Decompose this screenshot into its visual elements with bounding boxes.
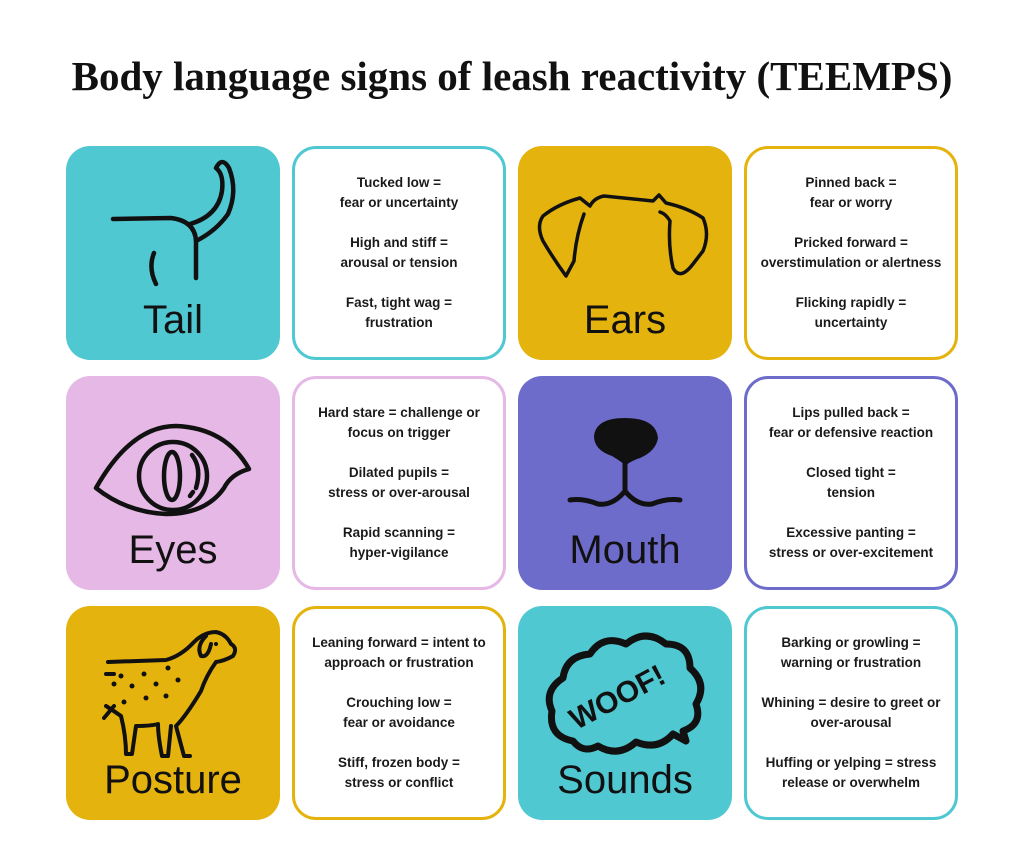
- panel: ears icon tile: Ears: [584, 298, 666, 342]
- panel: eyes text: stress or over-arousal: [328, 485, 470, 500]
- panel: posture text: Crouching low =: [346, 695, 452, 710]
- panel: tail text: frustration: [365, 315, 433, 330]
- panel: eyes icon tile: Eyes: [129, 528, 217, 572]
- panel: posture text: [292, 606, 506, 820]
- panel: mouth text: Lips pulled back =: [792, 405, 910, 420]
- panel: tail text: arousal or tension: [340, 255, 458, 270]
- panel: tail text: Tucked low =: [357, 175, 441, 190]
- panel: tail icon tile: [66, 146, 280, 360]
- panel: ears text: [744, 146, 958, 360]
- panel: eyes text: hyper-vigilance: [349, 545, 449, 560]
- panel: sounds text: release or overwhelm: [782, 775, 920, 790]
- panel: tail text: fear or uncertainty: [340, 195, 458, 210]
- panel: posture text: Stiff, frozen body =: [338, 755, 460, 770]
- panel: sounds text: Whining = desire to greet or: [762, 695, 940, 710]
- panel: posture text: fear or avoidance: [343, 715, 455, 730]
- panel: tail icon tile: Tail: [143, 298, 203, 342]
- icon: dog posture: [102, 630, 238, 758]
- panel: posture text: approach or frustration: [324, 655, 474, 670]
- panel: sounds text: over-arousal: [810, 715, 892, 730]
- panel: tail text: High and stiff =: [350, 235, 448, 250]
- panel: tail text: [292, 146, 506, 360]
- panel: mouth text: Excessive panting =: [786, 525, 916, 540]
- icon: woof bubble: [546, 632, 704, 755]
- panel: mouth text: [744, 376, 958, 590]
- panel: eyes text: [292, 376, 506, 590]
- panel: eyes text: Hard stare = challenge or: [318, 405, 480, 420]
- panel: eyes text: focus on trigger: [348, 425, 450, 440]
- panel: ears text: overstimulation or alertness: [761, 255, 941, 270]
- panel: tail text: Fast, tight wag =: [346, 295, 452, 310]
- panel: ears text: fear or worry: [810, 195, 892, 210]
- panel: posture text: Leaning forward = intent to: [312, 635, 486, 650]
- panel: eyes icon tile: [66, 376, 280, 590]
- panel: sounds text: Huffing or yelping = stress: [766, 755, 936, 770]
- icon: nose and mouth: [568, 418, 682, 507]
- panel: eyes text: Dilated pupils =: [349, 465, 449, 480]
- panel: sounds icon tile: Sounds: [557, 758, 693, 802]
- panel: eyes text: Rapid scanning =: [343, 525, 455, 540]
- icon: tail: [110, 160, 236, 286]
- panel: ears text: Pricked forward =: [794, 235, 908, 250]
- panel: mouth text: stress or over-excitement: [769, 545, 933, 560]
- panel: posture text: stress or conflict: [345, 775, 453, 790]
- title: Body language signs of leash reactivity (TEEMPS): [72, 53, 952, 99]
- icon: woof bubble: WOOF!: [564, 659, 671, 736]
- panel: ears text: Flicking rapidly =: [796, 295, 906, 310]
- panel: mouth text: tension: [827, 485, 875, 500]
- icon: eye: [94, 424, 252, 516]
- panel: ears text: Pinned back =: [805, 175, 897, 190]
- panel: posture icon tile: [66, 606, 280, 820]
- panel: ears icon tile: [518, 146, 732, 360]
- panel: sounds icon tile: [518, 606, 732, 820]
- panel: mouth text: fear or defensive reaction: [769, 425, 933, 440]
- panel: ears text: uncertainty: [815, 315, 887, 330]
- panel: sounds text: warning or frustration: [781, 655, 921, 670]
- panel: mouth text: Closed tight =: [806, 465, 896, 480]
- panel: mouth icon tile: [518, 376, 732, 590]
- panel: sounds text: Barking or growling =: [781, 635, 921, 650]
- panel: posture icon tile: Posture: [104, 758, 242, 802]
- icon: ears: [538, 193, 708, 278]
- panel: mouth icon tile: Mouth: [569, 528, 681, 572]
- panel: sounds text: [744, 606, 958, 820]
